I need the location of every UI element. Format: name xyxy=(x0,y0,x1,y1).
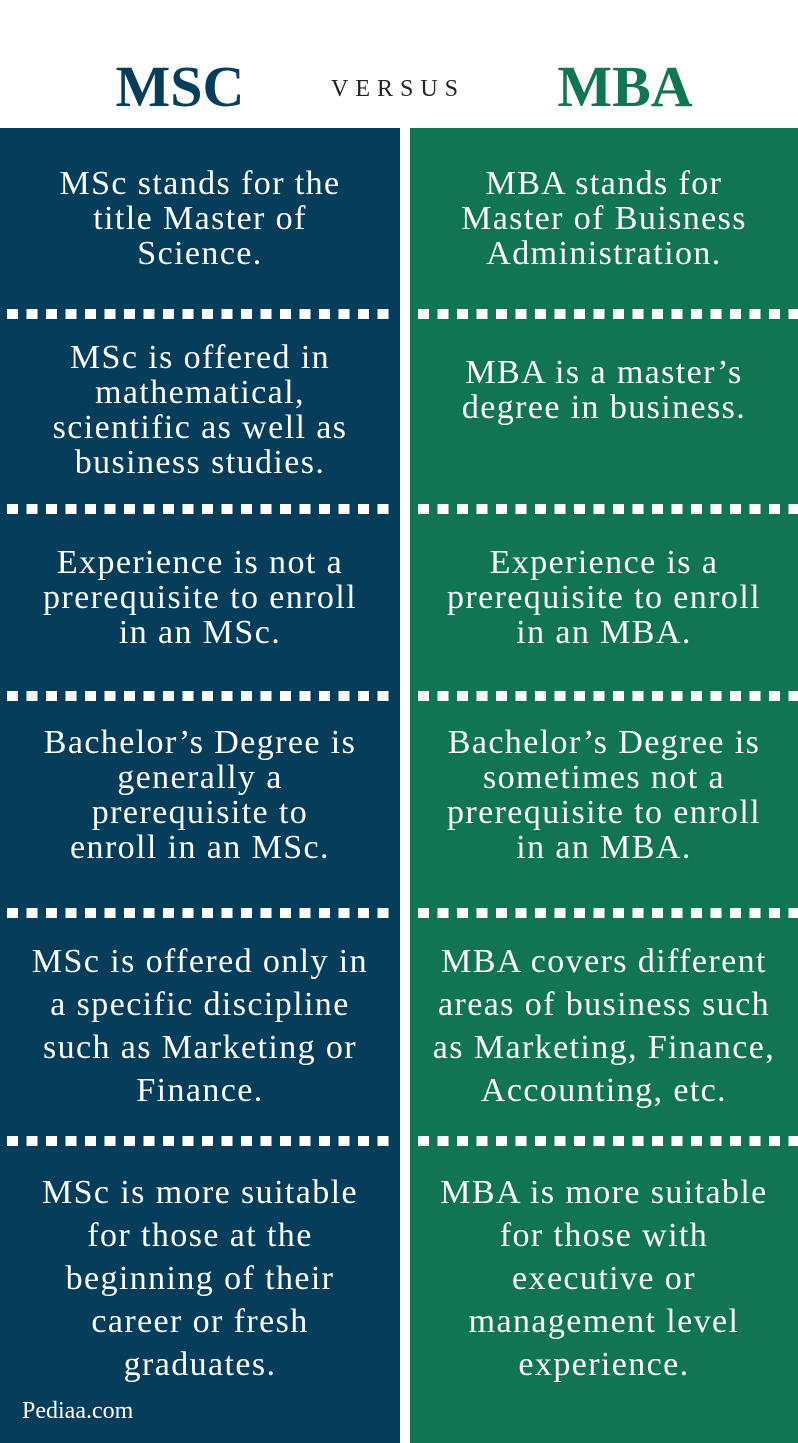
text: msc row 5 xyxy=(32,943,368,1109)
text: msc row 6: career or fresh xyxy=(91,1302,309,1340)
text: mba row 4 xyxy=(447,724,761,866)
text: msc row 2 xyxy=(53,339,347,481)
title: MBA: MBA xyxy=(557,54,693,119)
title: versus: VERSUS xyxy=(331,76,465,102)
text: mba row 5: MBA covers different xyxy=(441,943,767,980)
text: msc row 4 xyxy=(44,724,356,866)
text: msc row 1: title Master of xyxy=(93,200,307,236)
text: mba row 5: areas of business such xyxy=(438,986,770,1023)
text: msc row 6: beginning of their xyxy=(66,1260,334,1296)
text: msc row 2: mathematical, xyxy=(95,374,305,411)
text: mba row 6: management level xyxy=(469,1302,739,1340)
text: mba row 6: experience. xyxy=(518,1346,690,1382)
text: mba row 6: executive or xyxy=(512,1260,696,1296)
text: mba row 4: prerequisite to enroll xyxy=(447,794,761,831)
text: mba row 3: in an MBA. xyxy=(516,614,692,650)
text: msc row 4: prerequisite to xyxy=(92,794,308,831)
text: msc row 3: prerequisite to enroll xyxy=(43,578,357,616)
text: mba row 3: prerequisite to enroll xyxy=(447,578,761,616)
text: msc row 5: a specific discipline xyxy=(50,986,350,1023)
text: msc row 5: Finance. xyxy=(136,1072,264,1109)
text: mba row 3: Experience is a xyxy=(490,544,718,580)
text: msc row 1 xyxy=(59,164,341,272)
text: mba row 5: Accounting, etc. xyxy=(481,1072,727,1109)
text: mba row 6: for those with xyxy=(500,1216,708,1254)
text: msc row 1: MSc stands for the xyxy=(59,164,341,202)
text: mba row 1: Master of Buisness xyxy=(461,200,747,236)
text: msc row 6: graduates. xyxy=(124,1346,276,1382)
text: mba row 5: as Marketing, Finance, xyxy=(433,1029,775,1066)
title: MSC: MSC xyxy=(116,54,244,119)
text: msc row 4: generally a xyxy=(117,759,283,796)
text: mba row 6: MBA is more suitable xyxy=(440,1174,768,1210)
text: mba row 2: MBA is a master’s xyxy=(465,354,743,391)
text: msc row 5: MSc is offered only in xyxy=(32,943,368,980)
text: mba row 2 xyxy=(462,354,746,426)
text: msc row 3: Experience is not a xyxy=(57,544,343,580)
text: msc row 6: for those at the xyxy=(87,1216,313,1254)
text: msc row 2: business studies. xyxy=(75,444,325,481)
panel: MBA xyxy=(410,128,798,1443)
text: msc row 4: enroll in an MSc. xyxy=(70,829,330,866)
text: msc row 3 xyxy=(43,544,357,650)
text: msc row 2: scientific as well as xyxy=(53,409,347,446)
text: msc row 4: Bachelor’s Degree is xyxy=(44,724,356,761)
text: mba row 4: sometimes not a xyxy=(483,759,725,796)
text: mba row 6 xyxy=(440,1174,768,1382)
text: mba row 4: in an MBA. xyxy=(516,829,692,866)
text: mba row 1 xyxy=(461,164,747,272)
logo: Pediaa.com: Pediaa.com xyxy=(22,1398,133,1424)
panel: MSC xyxy=(0,128,400,1443)
text: mba row 2: degree in business. xyxy=(462,389,746,426)
text: mba row 4: Bachelor’s Degree is xyxy=(448,724,760,761)
text: mba row 1: MBA stands for xyxy=(486,164,722,202)
text: msc row 3: in an MSc. xyxy=(119,614,281,650)
text: mba row 1: Administration. xyxy=(486,234,722,272)
text: msc row 6 xyxy=(42,1174,358,1382)
text: mba row 3 xyxy=(447,544,761,650)
text: msc row 1: Science. xyxy=(137,234,263,272)
text: msc row 6: MSc is more suitable xyxy=(42,1174,358,1210)
text: msc row 2: MSc is offered in xyxy=(70,339,330,376)
text: msc row 5: such as Marketing or xyxy=(43,1029,357,1066)
text: mba row 5 xyxy=(433,943,775,1109)
